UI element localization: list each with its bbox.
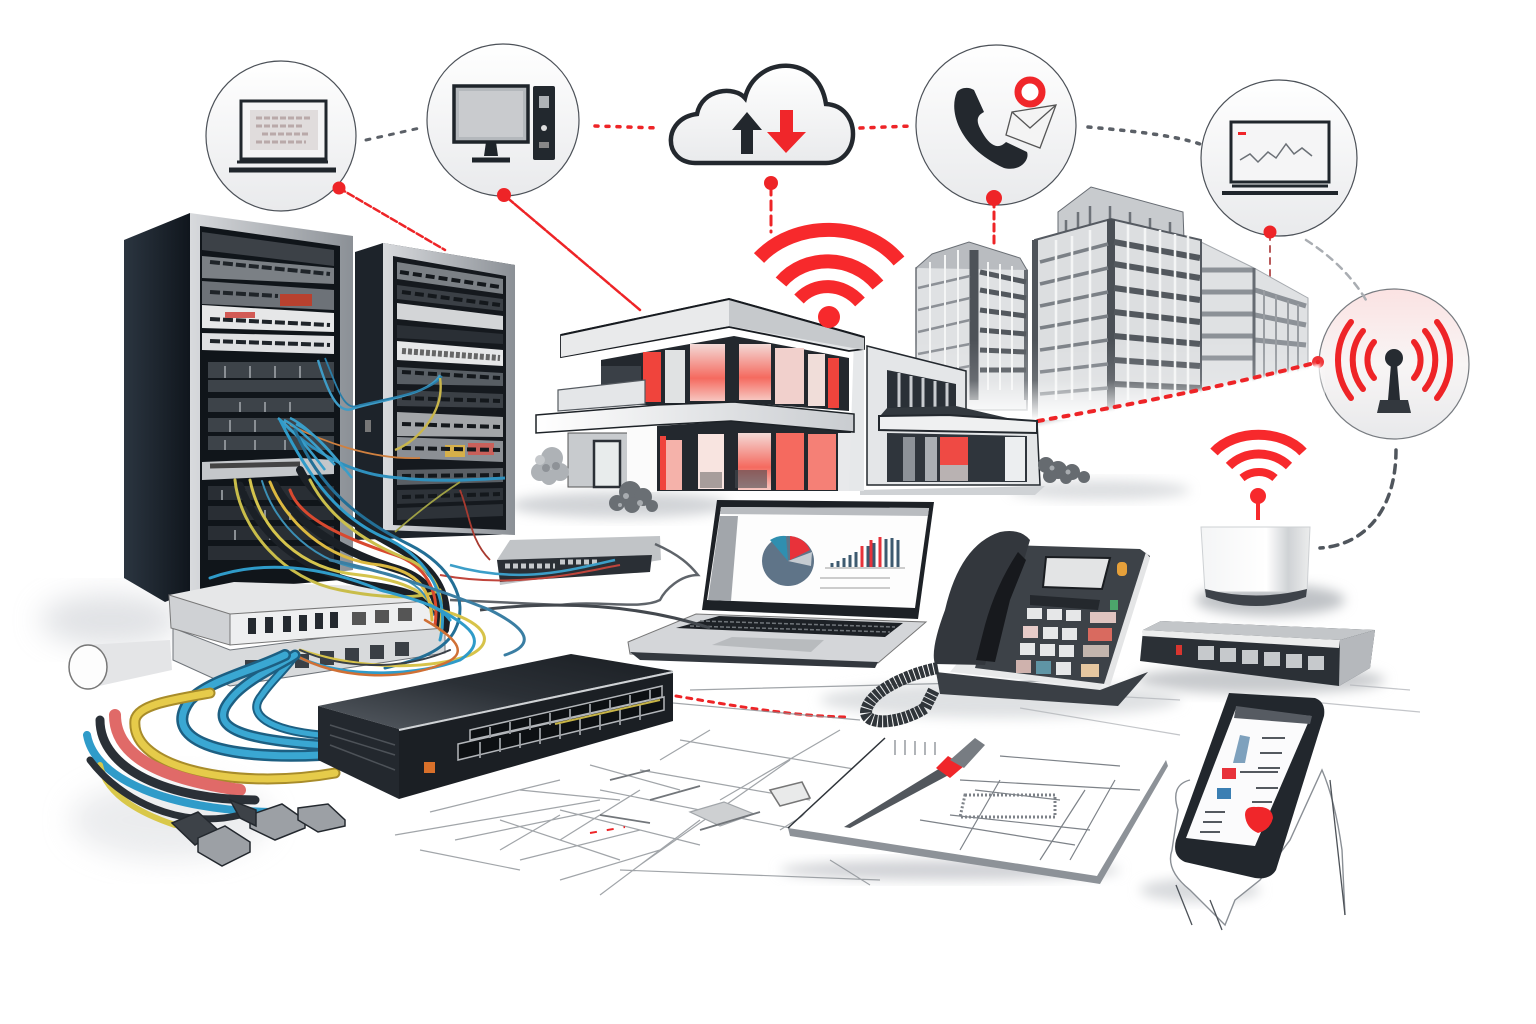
server rack left [124,213,353,602]
cables between racks [278,358,505,560]
colored cable bundle from rack [210,420,524,675]
icon circle: laptop with chart [1201,80,1357,236]
smartphone in hand [1170,693,1345,930]
office towers [916,187,1308,430]
dotted red line [1038,362,1318,421]
white fade below towers [900,340,1325,470]
server rack right [355,243,515,540]
big wifi symbol [759,230,899,328]
thick cable bundle [87,655,335,825]
ethernet connectors [172,800,345,866]
connection nodes [332,176,1324,368]
small router [1140,621,1375,686]
blueprint sheets [395,680,1420,895]
black network switch [318,654,673,799]
icon circle: telephone with notification [916,45,1076,205]
ground shading [40,480,1385,902]
notebook and pen [788,738,1168,884]
icon circle: laptop [206,61,356,211]
desk telephone [934,531,1150,706]
small wifi symbol [1214,435,1303,520]
stacked white switches [169,582,445,686]
center laptop [628,500,934,668]
connection lines [339,126,1396,717]
rear switch [440,536,710,628]
telephone coiled cord [866,668,938,721]
paper roll [69,640,172,689]
building [536,299,1045,495]
smart speaker hub [1201,527,1310,606]
red blueprint marks [590,827,625,833]
shrubs [531,447,1090,513]
icon: cloud with up and down arrows [671,66,853,163]
icon circle: antenna [1319,289,1469,439]
icon circle: desktop computer [427,44,579,196]
